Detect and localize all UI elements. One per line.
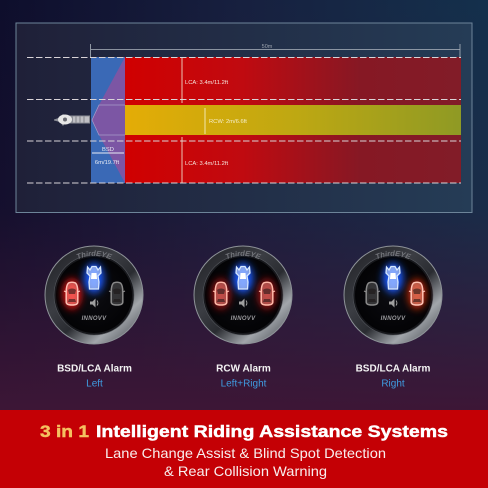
label: RCW: RCW: 2m/6.6ft	[209, 119, 247, 125]
caption: left alarm: BSD/LCA Alarm	[57, 364, 132, 374]
caption: centre alarm	[216, 364, 271, 390]
RCW marker	[204, 108, 206, 134]
label: BSD: BSD	[102, 147, 114, 153]
zone: RCW yellow	[125, 105, 461, 135]
zone: BSD blue	[91, 57, 125, 183]
icon: rider blue	[233, 263, 253, 293]
dial body	[344, 246, 442, 344]
50m dimension line	[90, 44, 460, 57]
panel: left alarm dial	[44, 246, 144, 344]
caption: right alarm: BSD/LCA Alarm	[356, 364, 431, 374]
zone: LCA red	[125, 57, 461, 183]
panel: bottom red banner	[0, 410, 488, 488]
icon: right car red	[258, 279, 276, 309]
title: 3 in 1	[40, 422, 89, 441]
icon: rider blue	[383, 263, 403, 293]
brand: ThirdEYE: ThirdEYE	[376, 250, 412, 260]
label: LCA lower: LCA: 3.4m/11.2ft	[185, 161, 228, 167]
brand: ThirdEYE: ThirdEYE	[76, 250, 112, 260]
icon: right car red	[408, 279, 426, 309]
brand: INNOVV: INNOVV	[381, 316, 406, 322]
label: BSD distance: 6m/19.7ft	[95, 160, 119, 166]
icon: speaker	[90, 298, 98, 308]
zone: BSD overlap purple	[92, 57, 125, 183]
icon: rider blue	[84, 263, 104, 293]
icon: right car off	[109, 282, 125, 305]
subtitle	[105, 445, 386, 479]
panel: detection diagram	[16, 23, 472, 212]
label: LCA upper: LCA: 3.4m/11.2ft	[185, 80, 228, 86]
icon: speaker	[239, 298, 247, 308]
RCW zone outline	[92, 105, 125, 135]
caption: centre alarm: RCW Alarm	[216, 364, 271, 374]
title: Intelligent Riding Assistance Systems	[96, 422, 448, 441]
caption: left alarm	[57, 364, 132, 390]
panel: centre alarm dial	[194, 246, 292, 344]
icon: motorcycle	[54, 114, 90, 126]
lane lines	[27, 58, 461, 183]
dial body	[194, 246, 292, 344]
subtitle: & Rear Collision Warning	[164, 463, 327, 479]
brand: INNOVV: INNOVV	[231, 316, 256, 322]
icon: left car off	[364, 282, 380, 305]
LCA lower marker	[181, 137, 183, 183]
caption: left alarm: Left	[86, 378, 103, 390]
caption: right alarm	[356, 364, 431, 390]
caption: centre alarm: Left+Right	[221, 378, 267, 390]
brand: INNOVV: INNOVV	[82, 316, 107, 322]
icon: left car red	[63, 279, 81, 309]
subtitle: Lane Change Assist & Blind Spot Detection	[105, 445, 386, 461]
BSD arrow	[92, 152, 124, 154]
caption: right alarm: Right	[381, 378, 405, 390]
LCA upper marker	[181, 58, 183, 103]
dial body	[45, 246, 143, 344]
label: 50m: 50m	[262, 44, 273, 50]
diagram frame	[16, 23, 472, 212]
panel: right alarm dial	[344, 246, 442, 344]
brand: ThirdEYE: ThirdEYE	[226, 250, 262, 260]
icon: speaker	[389, 298, 397, 308]
icon: left car red	[212, 279, 230, 309]
